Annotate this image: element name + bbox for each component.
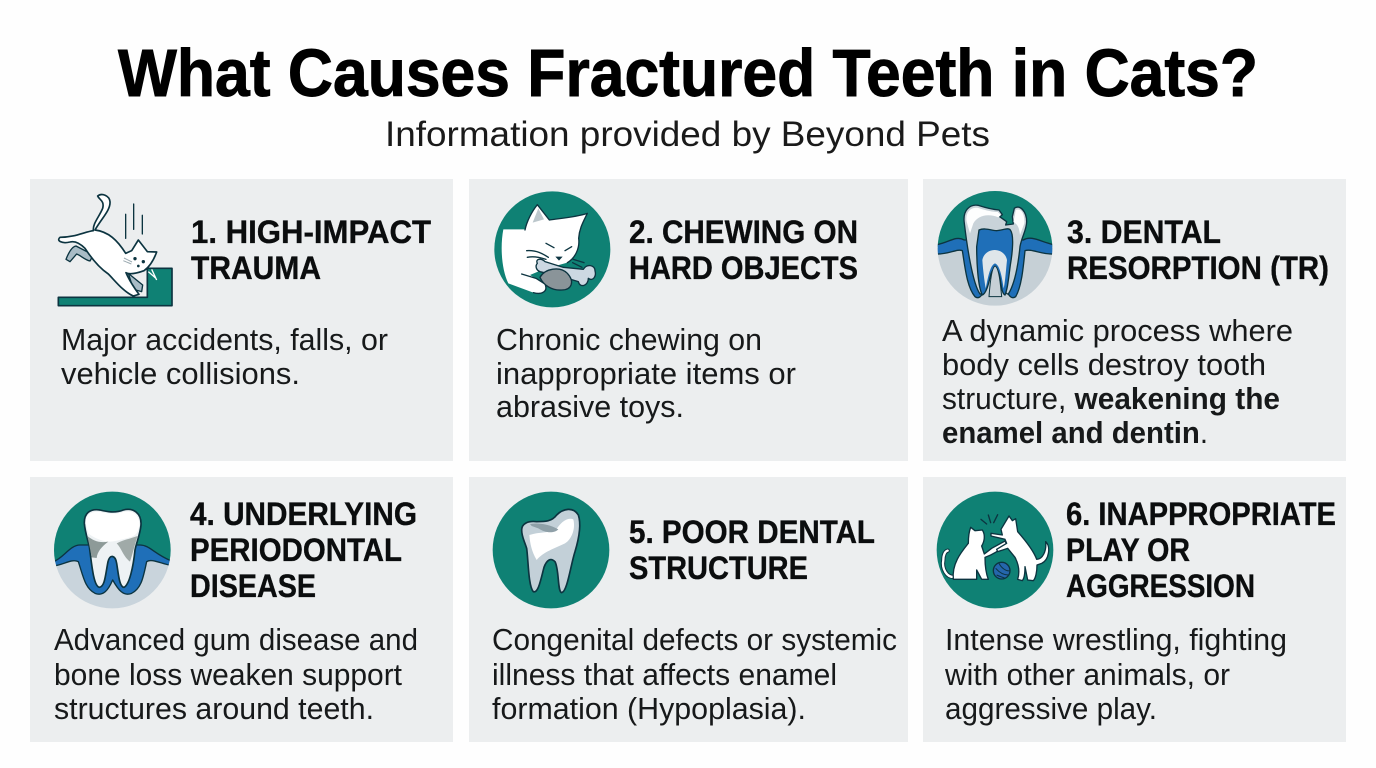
heading: 6. INAPPROPRIATE: [1066, 496, 1336, 532]
icon: two cats playing with a ball: [937, 492, 1053, 608]
heading: PERIODONTAL: [190, 532, 402, 568]
heading: AGGRESSION: [1066, 568, 1255, 604]
heading: TRAUMA: [191, 250, 321, 286]
body text: [61, 322, 388, 391]
body text: formation (Hypoplasia).: [492, 691, 806, 726]
panel: inappropriate play or aggression: [923, 477, 1346, 742]
heading: [629, 514, 875, 586]
panel: chewing on hard objects: [469, 179, 908, 461]
body text: Chronic chewing on: [496, 322, 762, 357]
heading: [629, 214, 858, 286]
heading: [191, 214, 431, 286]
body text: Advanced gum disease and: [54, 622, 418, 657]
body text: Intense wrestling, fighting: [945, 622, 1287, 657]
icon: tooth with resorption: [935, 190, 1055, 307]
subtitle: Information provided by Beyond Pets: [385, 115, 990, 154]
heading: PLAY OR: [1066, 532, 1190, 568]
icon: tooth with gum disease: [53, 490, 173, 610]
body text: [942, 313, 1293, 450]
icon: tooth with enamel defect: [493, 492, 609, 608]
body text: with other animals, or: [944, 657, 1230, 692]
body text: [944, 622, 1287, 726]
title: What Causes Fractured Teeth in Cats?: [118, 36, 1258, 111]
heading: DISEASE: [190, 568, 316, 604]
body text: body cells destroy tooth: [942, 347, 1266, 382]
body text: [496, 322, 796, 424]
panel: dental resorption: [923, 179, 1346, 461]
heading: 4. UNDERLYING: [190, 496, 417, 532]
body text: inappropriate items or: [496, 356, 796, 391]
heading: HARD OBJECTS: [629, 250, 858, 286]
body text: abrasive toys.: [496, 389, 684, 424]
body text: enamel and dentin.: [942, 415, 1208, 450]
body text: Major accidents, falls, or: [61, 322, 388, 357]
panel: underlying periodontal disease: [30, 477, 453, 742]
body text: A dynamic process where: [942, 313, 1293, 348]
panel: high-impact trauma: [30, 179, 453, 461]
heading: STRUCTURE: [629, 550, 808, 586]
heading: 2. CHEWING ON: [629, 214, 858, 250]
body text: aggressive play.: [945, 691, 1157, 726]
panel: poor dental structure: [469, 477, 908, 742]
heading: RESORPTION (TR): [1067, 250, 1329, 286]
heading: [190, 496, 417, 604]
icon: cat chewing a bone: [494, 191, 610, 307]
heading: 3. DENTAL: [1067, 214, 1221, 250]
body text: illness that affects enamel: [492, 657, 837, 692]
heading: [1066, 496, 1336, 604]
body text: [492, 622, 897, 726]
heading: 1. HIGH-IMPACT: [191, 214, 431, 250]
body text: [54, 622, 418, 726]
icon: cat falling onto a ledge: [58, 195, 172, 306]
heading: 5. POOR DENTAL: [629, 514, 875, 550]
heading: [1067, 214, 1329, 286]
body text: structures around teeth.: [54, 691, 374, 726]
body text: vehicle collisions.: [61, 356, 300, 391]
body text: bone loss weaken support: [54, 657, 402, 692]
body text: structure, weakening the: [942, 381, 1280, 416]
body text: Congenital defects or systemic: [492, 622, 897, 657]
